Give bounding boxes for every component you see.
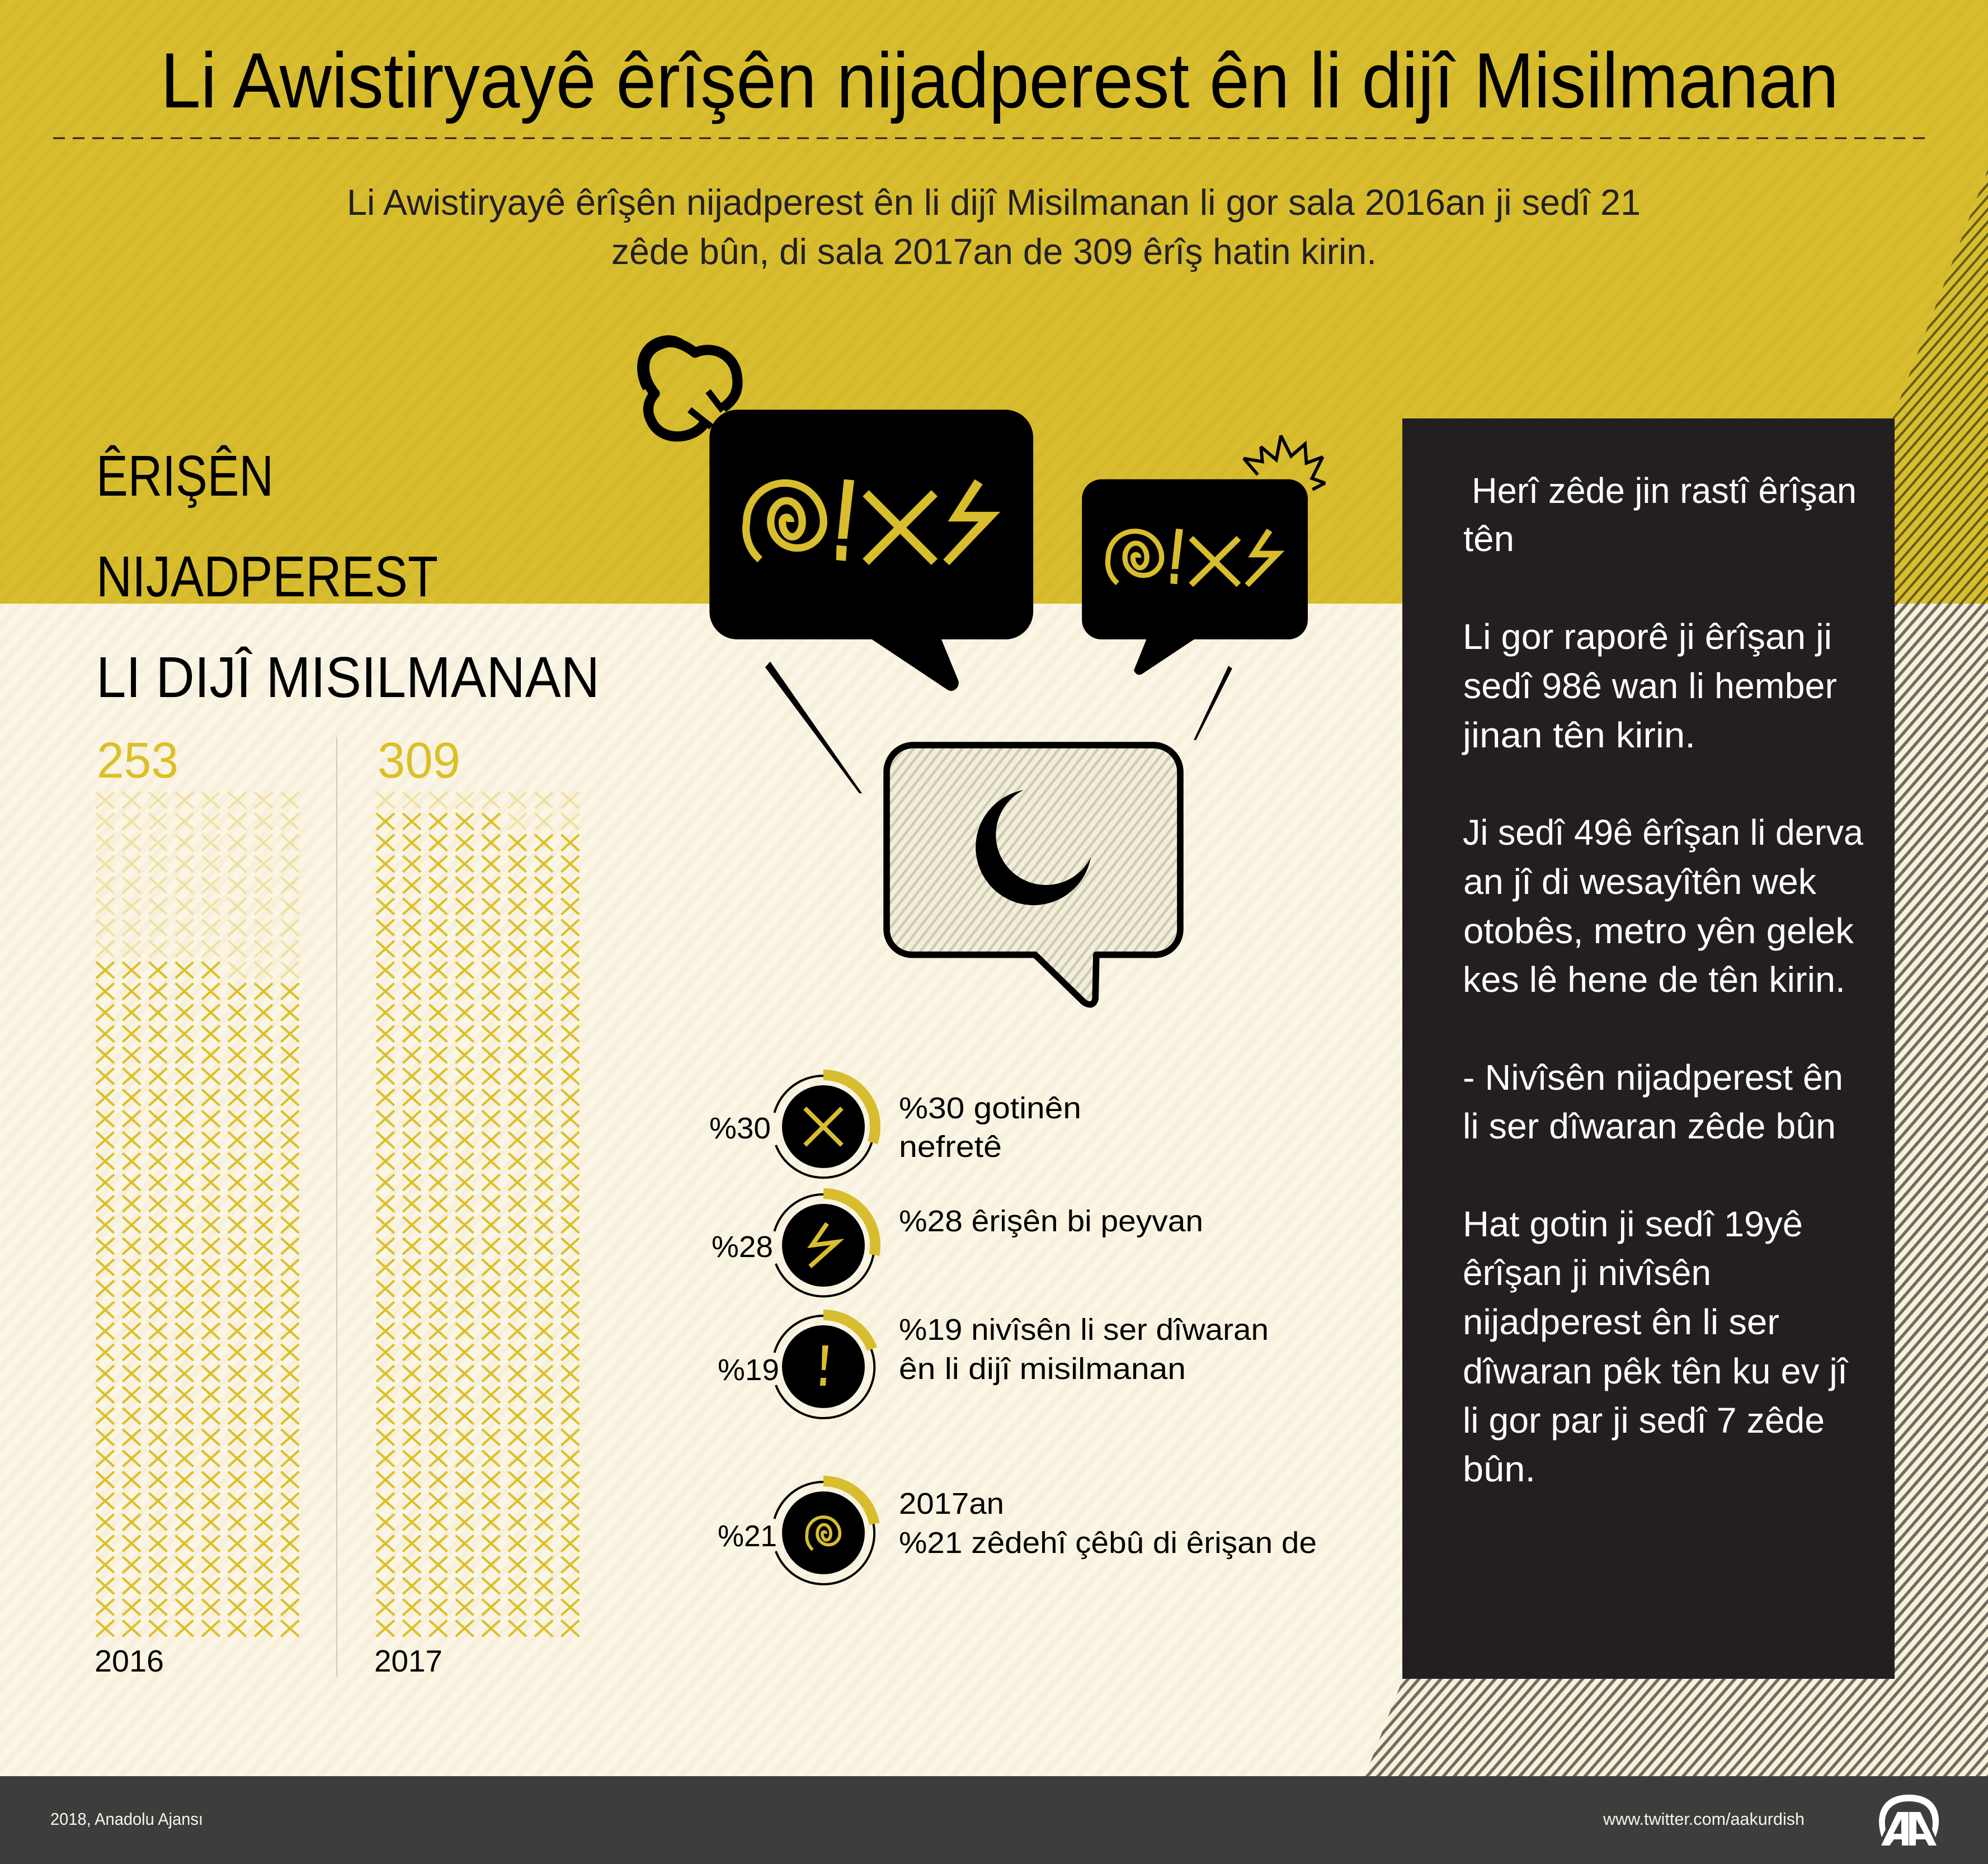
- icon: cloud outburst: [640, 338, 737, 436]
- paragraph 5: nijadperest ên li ser: [1463, 1302, 1779, 1342]
- solid crosses 2016: [92, 959, 303, 1639]
- panel: dark text panel: [1402, 418, 1895, 1679]
- description: %28 êrişên bi peyvan: [899, 1204, 1203, 1238]
- hatched speech bubble with crescent: [887, 745, 1180, 1005]
- description: [899, 1487, 1317, 1560]
- left heading: ÊRIŞÊN: [96, 444, 274, 508]
- percent label: %28: [712, 1230, 773, 1264]
- paragraph 3: otobês, metro yên gelek: [1463, 911, 1854, 951]
- description: %21 zêdehî çêbû di êrişan de: [899, 1526, 1317, 1560]
- paragraph 3: an jî di wesayîtên wek: [1463, 862, 1817, 902]
- description: %19 nivîsên li ser dîwaran: [899, 1313, 1269, 1347]
- percent label: %19: [718, 1353, 779, 1387]
- percent label: %30: [709, 1112, 771, 1145]
- paragraph 2: Li gor raporê ji êrîşan ji: [1463, 616, 1832, 657]
- paragraph 4: - Nivîsên nijadperest ên: [1463, 1057, 1843, 1098]
- paragraph 2: jinan tên kirin.: [1462, 715, 1695, 755]
- ring and disc: [774, 1315, 874, 1418]
- paragraph 4: [1463, 1057, 1843, 1146]
- paragraph 4: li ser dîwaran zêde bûn: [1463, 1106, 1836, 1146]
- paragraph 1: Herî zêde jin rastî êrîşan: [1472, 470, 1857, 511]
- left heading: [96, 444, 600, 709]
- paragraph 5: li gor par ji sedî 7 zêde: [1463, 1400, 1825, 1441]
- paragraph 3: [1463, 812, 1863, 1000]
- value 309: 309: [378, 733, 460, 789]
- footer bar: [0, 1776, 1988, 1864]
- paragraph 5: êrîşan ji nivîsên: [1463, 1253, 1711, 1293]
- left heading: LI DIJÎ MISILMANAN: [96, 645, 600, 709]
- connector line right: [1194, 666, 1232, 740]
- stat: 21 percent increase in 2017: [718, 1481, 1317, 1584]
- faded crosses 2017: [372, 789, 583, 832]
- paragraph 5: bûn.: [1463, 1449, 1535, 1489]
- stat: 19 percent wall writings: [718, 1313, 1269, 1418]
- icon: AA logo: [1879, 1795, 1939, 1846]
- paragraph 3: Ji sedî 49ê êrîşan li derva: [1463, 812, 1863, 853]
- paragraph 1: [1463, 470, 1857, 559]
- grawlix symbols, small: [1108, 529, 1284, 587]
- subtitle: [347, 182, 1641, 272]
- pictogram chart: 2016, 253 attacks: [92, 733, 303, 1678]
- paragraph 5: Hat gotin ji sedî 19yê: [1463, 1204, 1803, 1244]
- year label 2017: 2017: [374, 1644, 442, 1678]
- title: Li Awistiryayê êrîşên nijadperest ên li dijî Misilmanan: [161, 36, 1839, 124]
- background: yellow upper band: [0, 0, 1988, 604]
- large black speech bubble: [709, 409, 1033, 691]
- description: [899, 1313, 1269, 1386]
- subtitle: zêde bûn, di sala 2017an de 309 êrîş hatin kirin.: [611, 231, 1377, 272]
- paragraph 2: [1462, 616, 1837, 755]
- solid crosses 2017: [372, 811, 583, 1639]
- connector line left: [765, 662, 862, 793]
- percent label: %21: [718, 1519, 777, 1553]
- left heading: NIJADPEREST: [96, 544, 438, 609]
- paragraph 5: dîwaran pêk tên ku ev jî: [1463, 1351, 1849, 1391]
- paragraph 2: sedî 98ê wan li hember: [1463, 666, 1837, 706]
- ring and disc: [774, 1194, 875, 1296]
- description: [899, 1091, 1081, 1164]
- paragraph 1: tên: [1463, 519, 1514, 559]
- ring and disc: [774, 1075, 875, 1178]
- paragraph 3: kes lê hene de tên kirin.: [1463, 959, 1845, 1000]
- background: cream lower area: [0, 604, 1988, 1776]
- description: ên li dijî misilmanan: [899, 1352, 1186, 1386]
- footer url: www.twitter.com/aakurdish: [1603, 1809, 1805, 1829]
- stat: 28 percent verbal attacks: [712, 1194, 1203, 1296]
- hatched diagonal band on yellow: [1822, 169, 1988, 604]
- icon: spiky burst: [1244, 436, 1325, 489]
- description: %30 gotinên: [899, 1091, 1081, 1125]
- small black speech bubble: [1082, 479, 1308, 675]
- pictogram chart: 2017, 309 attacks: [372, 733, 583, 1678]
- footer credit: 2018, Anadolu Ajansı: [50, 1809, 203, 1829]
- faded crosses 2016: [92, 789, 303, 981]
- central speech bubble illustration: [640, 338, 1325, 1005]
- stat: 30 percent hate speech: [709, 1075, 1081, 1178]
- year label 2016: 2016: [95, 1644, 164, 1678]
- grawlix symbols, large: [746, 479, 1000, 565]
- value 253: 253: [97, 733, 178, 789]
- subtitle: Li Awistiryayê êrîşên nijadperest ên li dijî Misilmanan li gor sala 2016an ji sedî 21: [347, 182, 1641, 223]
- description: 2017an: [899, 1487, 1004, 1521]
- paragraph 5: [1463, 1204, 1849, 1489]
- ring and disc: [774, 1481, 874, 1584]
- description: nefretê: [899, 1130, 1002, 1164]
- hatched diagonal band on cream: [1365, 604, 1988, 1776]
- icon: crescent: [976, 790, 1091, 905]
